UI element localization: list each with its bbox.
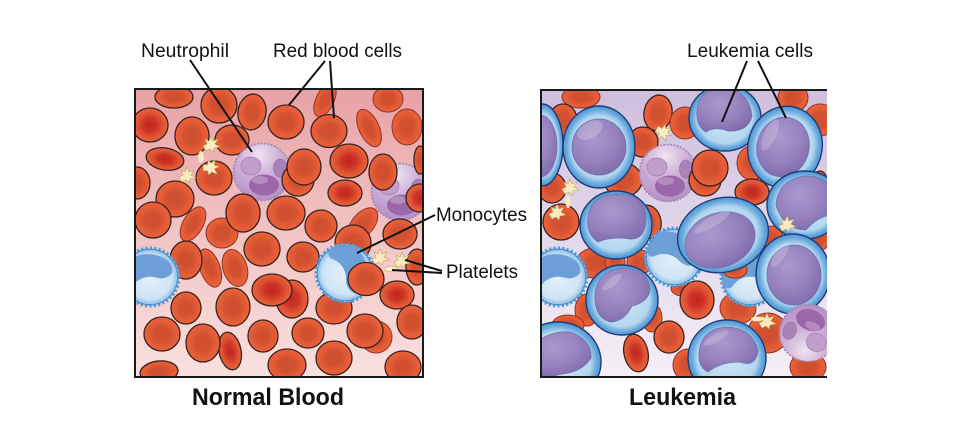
cell: leukemia right edge bbox=[766, 170, 827, 240]
cell: monocyte left bbox=[542, 246, 588, 308]
frame: leukemia panel border bbox=[541, 90, 827, 377]
cell: leukemia left edge bbox=[542, 103, 564, 187]
panel: leukemia illustration bbox=[540, 89, 827, 378]
cell: leukemia mid left bbox=[580, 191, 652, 259]
arrow: leukemia leader line 1 bbox=[722, 61, 747, 122]
panel: normal blood illustration bbox=[134, 88, 424, 378]
title: Leukemia: Leukemia bbox=[629, 384, 736, 411]
cell: leukemia bottom centre bbox=[687, 319, 767, 376]
cell: leukemia bottom left bbox=[542, 321, 602, 376]
heading: Monocytes label: Monocytes bbox=[436, 205, 527, 226]
title: Normal Blood: Normal Blood bbox=[192, 384, 344, 411]
arrow: platelet leader line 2 bbox=[392, 270, 442, 273]
cell: leukemia top centre bbox=[689, 85, 761, 151]
arrow: neutrophil leader line bbox=[190, 60, 252, 152]
platelets: normal blood bbox=[179, 136, 411, 272]
heading: Platelets label: Platelets bbox=[446, 262, 518, 283]
heading: Leukemia cells label: Leukemia cells bbox=[687, 41, 813, 62]
cell: neutrophil bbox=[234, 144, 290, 200]
heading: Red blood cells label: Red blood cells bbox=[273, 41, 402, 62]
arrow: platelet leader line 1 bbox=[405, 260, 442, 271]
heading: Neutrophil label: Neutrophil bbox=[141, 41, 229, 62]
cell: leukemia top right bbox=[746, 106, 824, 186]
cell: monocyte centre bbox=[644, 226, 702, 288]
cell: neutrophil lower right bbox=[778, 304, 827, 362]
cell: monocyte centre bbox=[314, 242, 374, 304]
cell: leukemia top left bbox=[563, 106, 635, 188]
cell: leukemia centre large bbox=[676, 196, 770, 274]
cell: monocyte left bbox=[136, 246, 180, 308]
arrow: red blood cell leader line 1 bbox=[289, 61, 325, 105]
arrow: leukemia leader line 2 bbox=[758, 61, 786, 118]
cell: neutrophil right edge bbox=[372, 164, 428, 220]
arrow: red blood cell leader line 2 bbox=[330, 61, 334, 118]
cell: neutrophil bbox=[640, 144, 696, 202]
cell: leukemia lower right bbox=[756, 234, 830, 314]
cell: leukemia lower centre bbox=[586, 265, 658, 335]
cell: monocyte right bbox=[720, 254, 766, 308]
platelets: leukemia bbox=[549, 121, 796, 329]
arrow: monocyte leader line bbox=[357, 215, 435, 253]
